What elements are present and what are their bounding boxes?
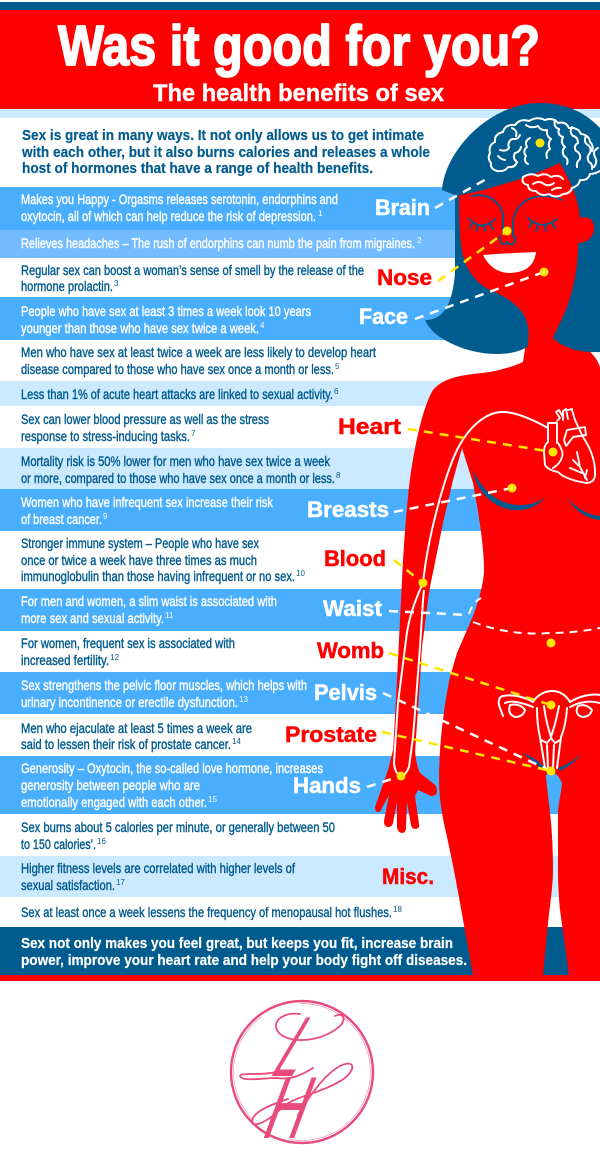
row: mortality: or more, compared to those who have sex once a month or less. [21, 470, 335, 486]
row: pelvic floor: 13 [239, 695, 248, 704]
intro text: host of hormones that have a range of health benefits. [22, 160, 373, 177]
subtitle: The health benefits of sex [153, 80, 445, 107]
row: happy [21, 191, 338, 224]
connector: pelvis [383, 693, 551, 771]
label: Face: Face [359, 304, 408, 329]
connector: prostate [382, 732, 551, 771]
row: pelvic floor: Sex strengthens the pelvic floor muscles, which helps with [21, 677, 307, 693]
row: younger: 4 [260, 321, 265, 330]
row: breast cancer: of breast cancer. [21, 511, 102, 527]
row: younger: younger than those who have sex twice a week. [21, 320, 259, 336]
row: heart attacks: 6 [334, 387, 339, 396]
row: fitness: sexual satisfaction. [21, 877, 115, 893]
row: pelvic floor [21, 677, 307, 710]
logo: LH monogram [231, 999, 373, 1157]
row: fitness: Higher fitness levels are correlated with higher levels of [21, 860, 295, 876]
waist line [469, 598, 600, 634]
row: mortality: 8 [336, 471, 341, 480]
row: fertility: increased fertility. [21, 652, 109, 668]
label: Breasts: Breasts [307, 497, 389, 522]
row: generosity [21, 760, 323, 810]
logo letter L: L [261, 999, 334, 1094]
row: calories: Sex burns about 5 calories per minute, or generally between 50 [21, 819, 335, 835]
row: heart disease [21, 344, 376, 377]
row: headaches: Relieves headaches – The rush of endorphins can numb the pain from migraines. [21, 235, 415, 251]
pelvic curves [522, 753, 581, 771]
row: fertility: For women, frequent sex is associated with [21, 635, 235, 651]
row: smell: Regular sex can boost a woman’s sense of smell by the release of the [21, 262, 364, 278]
connector: blood [394, 560, 423, 583]
row: slim waist [21, 593, 277, 626]
icon: heart [544, 409, 595, 483]
row: calories: to 150 calories’. [21, 836, 96, 852]
connector: breasts [394, 488, 512, 512]
row: immune system: 10 [296, 569, 305, 578]
hand [375, 750, 437, 833]
row: heart disease: 5 [335, 362, 340, 371]
row: blood pressure: 7 [191, 429, 196, 438]
row: happy: oxytocin, all of which can help reduce the risk of depression. [21, 208, 316, 224]
row: generosity: 15 [208, 795, 217, 804]
row: breast cancer [21, 494, 274, 527]
connector: womb [389, 653, 551, 705]
row: immune system: Stronger immune system – People who have sex [21, 535, 259, 551]
illustration: woman figure [375, 103, 600, 975]
header banner [0, 10, 600, 109]
intro text: with each other, but it also burns calories and releases a whole [21, 144, 430, 161]
connector: heart [408, 429, 553, 452]
row: calories [21, 819, 335, 852]
icon: uterus [499, 691, 600, 768]
row: blood pressure: response to stress-inducing tasks. [21, 428, 190, 444]
row: heart disease: disease compared to those who have sex once a month or less. [21, 361, 334, 377]
intro text [21, 127, 430, 177]
row: fertility [21, 635, 235, 668]
row: smell: hormone prolactin. [21, 278, 113, 294]
marker dots [396, 138, 558, 780]
label: Waist: Waist [323, 596, 383, 621]
row: heart attacks: Less than 1% of acute heart attacks are linked to sexual activity. [21, 386, 333, 402]
body and arm [393, 335, 600, 975]
row: generosity: Generosity – Oxytocin, the so-called love hormone, increases [21, 760, 323, 776]
row: smell [21, 262, 364, 294]
mouth [483, 252, 536, 273]
label: Brain: Brain [375, 195, 430, 220]
row: prostate cancer: 14 [232, 737, 241, 746]
label: Pelvis: Pelvis [314, 680, 377, 705]
label: Blood: Blood [324, 546, 386, 571]
row: younger: People who have sex at least 3 times a week look 10 years [21, 303, 311, 319]
row: prostate cancer: said to lessen their risk of prostate cancer. [21, 736, 231, 752]
row: immune system: immunoglobulin than those having infrequent or no sex. [21, 568, 295, 584]
row: fitness: 17 [116, 878, 125, 887]
hair [425, 103, 600, 354]
row: prostate cancer [21, 720, 252, 752]
closing statement: power, improve your heart rate and help your body fight off diseases. [21, 952, 467, 969]
label: Misc.: Misc. [382, 864, 434, 889]
row: breast cancer: Women who have infrequent sex increase their risk [21, 494, 274, 510]
row: blood pressure [21, 411, 269, 444]
row: happy: Makes you Happy - Orgasms releases serotonin, endorphins and [21, 191, 338, 207]
connector: brain [435, 177, 490, 208]
row: younger [21, 303, 311, 336]
connector: face [415, 272, 544, 319]
row: generosity: generosity between people who are [21, 777, 200, 793]
row: breast cancer: 9 [103, 512, 108, 521]
row: fitness [21, 860, 295, 893]
breasts [473, 470, 600, 520]
row: mortality [21, 453, 341, 486]
row: mortality: Mortality risk is 50% lower for men who have sex twice a week [21, 453, 331, 469]
closing statement: Sex not only makes you feel great, but keeps you fit, increase brain [21, 935, 453, 952]
row: smell: 3 [114, 279, 119, 288]
facial features [469, 195, 562, 244]
connector: nose [438, 231, 507, 281]
row: slim waist: 11 [165, 611, 174, 620]
row: calories: 16 [97, 837, 106, 846]
row: pelvic floor: urinary incontinence or erectile dysfunction. [21, 694, 238, 710]
row: slim waist: For men and women, a slim waist is associated with [21, 593, 277, 609]
intro text: Sex is great in many ways. It not only allows us to get intimate [22, 127, 424, 144]
row: blood pressure: Sex can lower blood pressure as well as the stress [21, 411, 269, 427]
row: fertility: 12 [110, 653, 119, 662]
row: happy: 1 [318, 209, 323, 218]
artery lines [394, 412, 548, 776]
face [459, 163, 594, 350]
label: Hands: Hands [293, 773, 361, 798]
label: Prostate: Prostate [285, 722, 377, 747]
label: Nose: Nose [377, 265, 432, 290]
logo ring [231, 1001, 373, 1143]
logo letter H: H [257, 1058, 322, 1157]
row: immune system [21, 535, 305, 584]
brain [489, 118, 600, 196]
connector: waist [389, 611, 468, 615]
row: immune system: once or twice a week have three times as much [21, 552, 257, 568]
row: heart disease: Men who have sex at least twice a week are less likely to develop heart [21, 344, 376, 360]
label: Heart: Heart [338, 414, 402, 439]
label: Womb: Womb [317, 638, 384, 663]
row: hot flushes: 18 [393, 905, 402, 914]
row: slim waist: more sex and sexual activity. [21, 610, 164, 626]
row: hot flushes: Sex at least once a week lessens the frequency of menopausal hot flushes. [21, 904, 392, 920]
logo flourishes [240, 1014, 352, 1124]
closing statement [21, 935, 467, 969]
row: generosity: emotionally engaged with each other. [21, 794, 207, 810]
row: prostate cancer: Men who ejaculate at least 5 times a week are [21, 720, 252, 736]
row: headaches: 2 [417, 236, 422, 245]
connector: hands [367, 776, 401, 787]
